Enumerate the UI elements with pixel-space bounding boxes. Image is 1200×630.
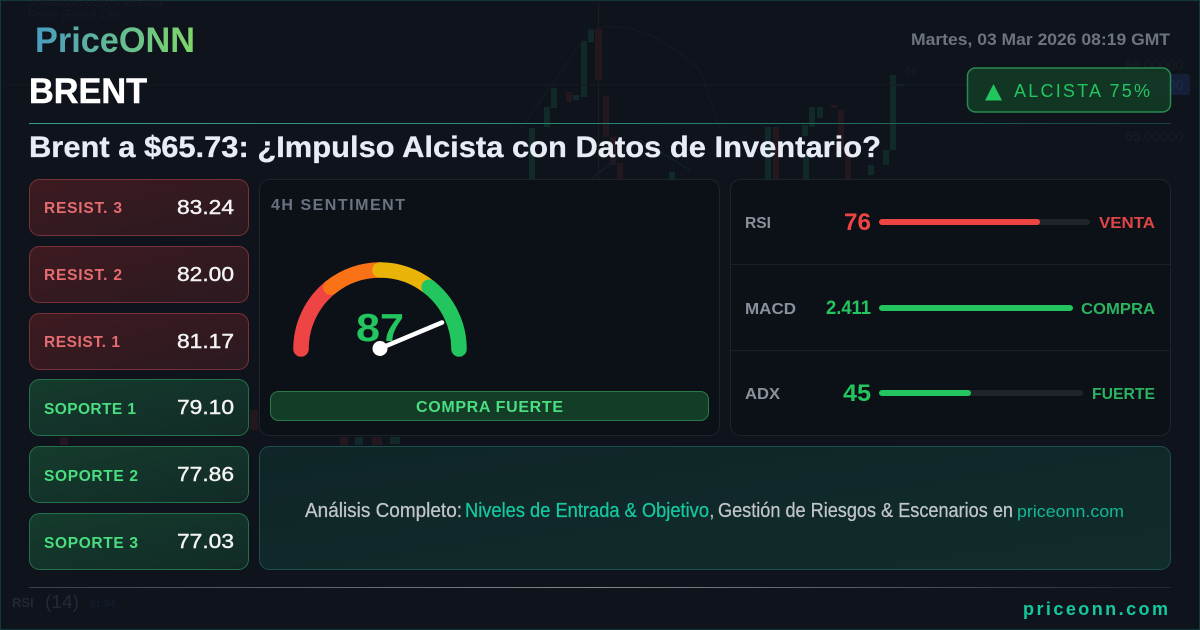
panel: 4H sentiment — [260, 180, 720, 436]
background candlestick chart: 65.73000 — [1125, 77, 1184, 93]
sentiment label pill — [270, 392, 708, 420]
level: resistance 1 — [30, 314, 248, 370]
level: support 2: 77.86 — [177, 463, 234, 486]
indicator: RSI: VENTA — [1099, 215, 1155, 232]
background candlestick chart: 61.94 — [90, 599, 115, 610]
indicator: MACD — [745, 298, 1155, 319]
level: support 1 — [30, 380, 248, 436]
call to action text — [305, 499, 1124, 522]
indicator: MACD: 2.411 — [826, 298, 871, 319]
level: support 3 — [30, 514, 248, 570]
gauge chart: 87 — [356, 307, 404, 350]
indicator: ADX: 45 — [843, 380, 871, 407]
level: support 2: SOPORTE 2 — [44, 468, 138, 485]
call to action text: Niveles de Entrada & Objetivo — [465, 499, 709, 522]
level: support 1: 79.10 — [177, 396, 234, 419]
indicator: MACD: COMPRA — [1081, 301, 1155, 318]
indicator: MACD: MACD — [745, 301, 796, 318]
headline: Brent a $65.73: ¿Impulso Alcista con Datos de Inventario? — [29, 131, 881, 164]
trend badge: ALCISTA 75% — [1014, 81, 1150, 101]
call to action text: , — [709, 499, 715, 522]
level: support 1: SOPORTE 1 — [44, 401, 136, 418]
icon: up triangle — [985, 84, 1002, 100]
gauge chart — [301, 270, 459, 356]
logo: PriceONN — [35, 21, 195, 60]
call to action text: priceonn.com — [1017, 503, 1124, 521]
panel: indicators — [730, 180, 1170, 436]
date: Martes, 03 Mar 2026 08:19 GMT — [911, 30, 1171, 49]
heading: 4H sentiment: 4H SENTIMENT — [271, 197, 405, 214]
background candlestick chart: (14) — [45, 592, 79, 612]
call to action text: Gestión de Riesgos & Escenarios en — [718, 499, 1013, 522]
footer website: priceonn.com — [1023, 599, 1168, 619]
level: support 2 — [30, 446, 248, 502]
level: resistance 1: RESIST. 1 — [44, 334, 120, 351]
level: resistance 2 — [30, 246, 248, 302]
level: resistance 1: 81.17 — [177, 330, 234, 353]
background candlestick chart: Price (Brent Oil) — [28, 7, 120, 22]
indicator: RSI: 76 — [844, 209, 871, 236]
panel: call to action — [260, 446, 1170, 570]
sentiment label pill: COMPRA FUERTE — [416, 399, 563, 416]
level: resistance 3: 83.24 — [177, 196, 234, 219]
background candlestick chart: RSI — [12, 595, 34, 610]
indicator: RSI — [745, 209, 1155, 236]
background candlestick chart: 66 — [905, 65, 917, 77]
background candlestick chart: 66.00000 — [1125, 57, 1184, 73]
gauge needle — [372, 322, 442, 356]
level: resistance 3 — [30, 180, 248, 236]
indicator: ADX: FUERTE — [1092, 386, 1155, 403]
indicator: ADX: ADX — [745, 386, 780, 403]
call to action text: Análisis Completo: — [305, 499, 462, 522]
level: resistance 2: 82.00 — [177, 263, 234, 286]
level: resistance 2: RESIST. 2 — [44, 267, 122, 284]
panel: price levels — [30, 180, 248, 570]
level: support 3: SOPORTE 3 — [44, 535, 138, 552]
level: support 3: 77.03 — [177, 530, 234, 553]
level: resistance 3: RESIST. 3 — [44, 200, 122, 217]
indicator: ADX — [745, 380, 1155, 407]
asset title: BRENT — [29, 72, 147, 111]
background candlestick chart: 65.00000 — [1125, 128, 1184, 144]
trend badge — [968, 68, 1170, 112]
indicator: RSI: RSI — [745, 215, 771, 232]
